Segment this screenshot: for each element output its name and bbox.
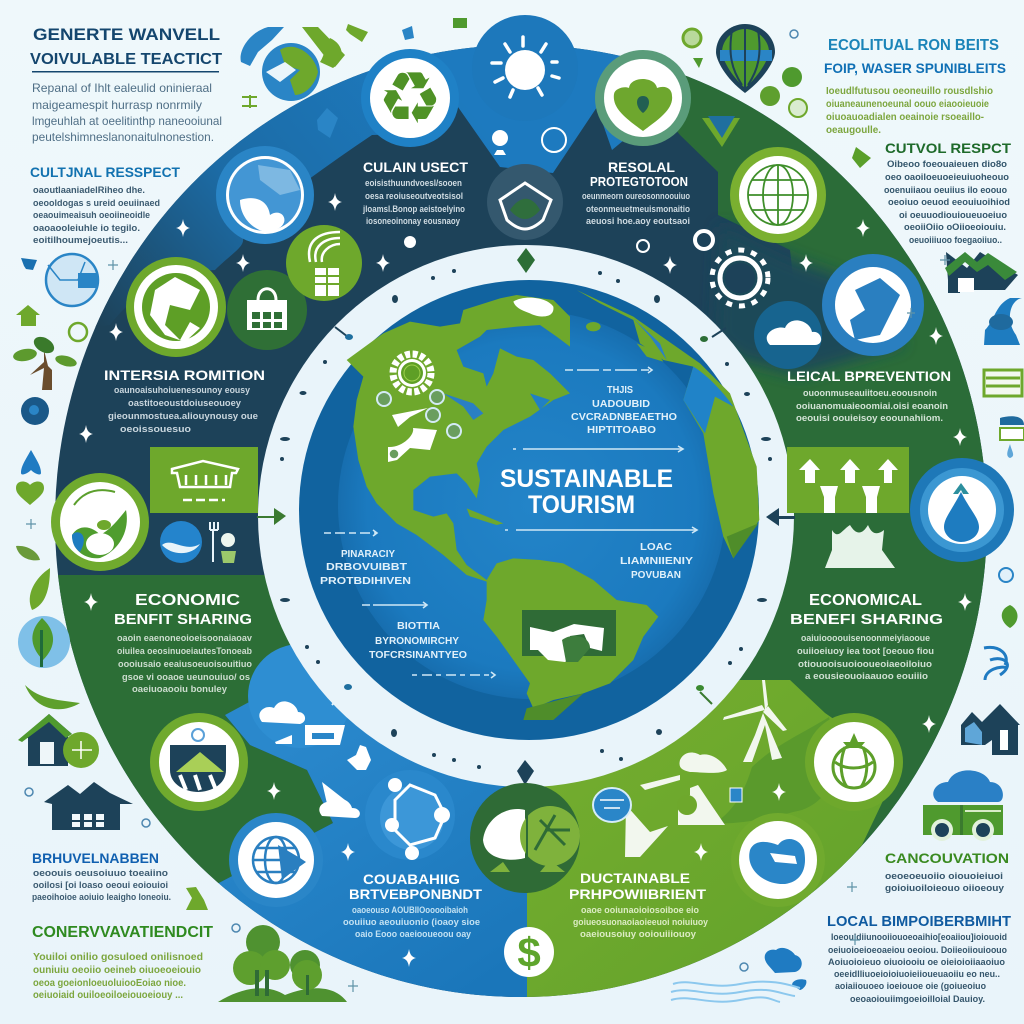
map land masses bbox=[347, 290, 759, 720]
text: top centre right panel: RESOLAL bbox=[608, 159, 675, 175]
text: top centre right panel: PROTEGTOTOON bbox=[590, 174, 688, 189]
white people silhouettes bbox=[825, 525, 895, 568]
circle: left earth bbox=[51, 473, 149, 571]
panel: globe bbox=[299, 280, 759, 740]
text: top centre left panel: CULAIN USECT bbox=[363, 159, 468, 175]
text: conservation bottom right: CANCOUVATION bbox=[885, 850, 1009, 866]
globe label: right: LOAC bbox=[640, 542, 672, 553]
icon: gear and people bbox=[377, 354, 461, 462]
icon: drop and heart bbox=[16, 450, 44, 505]
globe label: lower left: BYRONOMIRCHY bbox=[375, 636, 459, 647]
text: top centre left panel: eoisisthuundvoesl/sooen bbox=[365, 178, 462, 188]
circle: center leaves bbox=[470, 783, 580, 893]
text: cultural respect left: CULTJNAL RESSPECT bbox=[30, 164, 180, 180]
text: cultural respect right: Oibeoo foeouaieuen dio8o bbox=[887, 159, 1008, 169]
text: bottom left blue block bbox=[32, 850, 171, 902]
text: conservation bottom left: oeiuoiaid ouiloeoiloeiouoeiouy ... bbox=[33, 990, 183, 1001]
globe label: upper right: HIPTITOABO bbox=[587, 425, 656, 436]
text: top centre right panel: aeuosi hoe.aoy eoutsaoi bbox=[586, 216, 690, 226]
icon: cloud truck bbox=[923, 770, 1003, 841]
cloud badge right bbox=[754, 301, 822, 369]
left green box with pot icon bbox=[150, 447, 258, 513]
heading and text: ecological top right bbox=[824, 37, 1006, 136]
text: conservation bottom left: CONERVVAVATIENDCIT bbox=[32, 924, 213, 941]
circle: dollar: $ bbox=[517, 929, 541, 976]
text: economical benefit right bbox=[790, 592, 943, 681]
heading and text: ecological top right: Ioeudlfutusou oeoneuillo rousdlshio bbox=[826, 86, 993, 97]
text: economical benefit right: ouiioeiuoy iea toot [oeouo fiou bbox=[797, 646, 934, 656]
text: intro right panel: ouoonmuseauiitoeu.eoousnoin bbox=[803, 388, 937, 398]
text: economic benefit left: BENFIT SHARING bbox=[114, 611, 252, 628]
icon: small green house bbox=[16, 305, 40, 326]
text: economical benefit right: otiouooisuoiooueoiaeoiloiuo bbox=[798, 659, 933, 669]
text: intro paragraph: peutelshimneslanonaitulnonestion. bbox=[32, 130, 214, 144]
text: top centre left panel bbox=[362, 159, 468, 226]
text: bottom left blue block: ooilosi [oi loaso oeoui eoiouioi bbox=[33, 880, 168, 890]
icon: large house bbox=[44, 782, 133, 830]
text: intro right panel bbox=[787, 368, 951, 423]
text: conservation bottom left: oeoa goeionloeuoluiooEoiao nioe. bbox=[33, 978, 186, 989]
heading and text: ecological top right: oiuaneaunenoeunal oouo eiaooieuoie bbox=[826, 99, 989, 110]
text: bottom left inner panel: oouiiuo aeouiuonio (ioaoy sioe bbox=[343, 917, 480, 927]
text: conservation bottom left bbox=[32, 924, 213, 1001]
text: economic benefit left: oaoin eaenoneoioeisoonaiaoav bbox=[117, 633, 252, 643]
icon: leaves bbox=[16, 546, 50, 610]
arrow: dashed upper right bbox=[565, 367, 652, 373]
text: cultural respect right: CUTVOL RESPCT bbox=[885, 140, 1011, 156]
text: intro right panel: LEICAL BPREVENTION bbox=[787, 368, 951, 384]
heading and text: ecological top right: oeaugoulle. bbox=[826, 125, 881, 136]
globe label: upper right: THJIS bbox=[607, 385, 633, 396]
text: bottom left inner panel: BRTVEBPONBNDT bbox=[349, 886, 482, 902]
cloud and tag icon bbox=[259, 701, 345, 745]
text: intro right panel: ooiuanomuaieoomiai.oisi eoanoin bbox=[796, 401, 948, 411]
ring dots bbox=[280, 269, 772, 769]
icon: small green palm bbox=[186, 887, 208, 910]
text: top centre right panel bbox=[582, 159, 690, 226]
globe label: lower left: TOFCRSINANTYEO bbox=[369, 650, 467, 661]
text: top centre right panel: oteonmeuetmeuismonaitio bbox=[586, 204, 690, 214]
text: top centre right panel: oeunmeorn oureosonnoouiuo bbox=[582, 191, 690, 201]
text: intro left panel: INTERSIA ROMITION bbox=[104, 367, 265, 383]
icon: top-left globe with swooshes bbox=[241, 27, 345, 101]
circle: sun bbox=[472, 15, 578, 121]
arrow: left lower dashed bbox=[412, 672, 495, 678]
text: intro paragraph bbox=[32, 81, 222, 144]
text: economic benefit left bbox=[114, 592, 253, 694]
panel: central white ring bbox=[258, 245, 794, 787]
title bbox=[500, 465, 673, 519]
text: cultural respect right bbox=[884, 140, 1011, 245]
text: economic benefit left: oiuilea oeosinuoeiautesTonoeab bbox=[117, 646, 252, 656]
icon: green list bbox=[984, 370, 1022, 396]
circle: heart bbox=[595, 50, 691, 146]
icon: balloon globe bbox=[716, 24, 775, 93]
icon: calendar badge bbox=[227, 270, 307, 350]
text: local empowerment bottom right: oeiuoioeioeoaeiou oeoiou. Doiieoiiouioouo bbox=[828, 945, 1007, 955]
icon: leaf top-left of bottom bbox=[25, 685, 80, 709]
stars bbox=[79, 193, 972, 967]
text: cultural respect left bbox=[30, 164, 180, 245]
text: conservation bottom right: oeoeoeuoiio oiouoieiuoi bbox=[885, 871, 1003, 881]
text: economical benefit right: a eousieouoiaauoo eouiiio bbox=[805, 671, 929, 681]
text: local empowerment bottom right: Aoiuoioieuo oiuoiooiu oe oieioioiiaaoiuo bbox=[828, 957, 1005, 967]
globe label: left bbox=[320, 549, 411, 587]
circle: right blue continent bbox=[822, 254, 924, 356]
title: TOURISM bbox=[528, 491, 635, 519]
globe label: lower left bbox=[369, 621, 467, 661]
globe label: upper right: CVCRADNBEAETHO bbox=[571, 412, 677, 423]
small white icons bbox=[404, 128, 649, 252]
text: intro left panel: gieounmostuea.aliouynousy oue bbox=[108, 411, 258, 421]
icon: small plus left bbox=[242, 95, 257, 108]
icon: light bulb badge bbox=[286, 225, 362, 301]
text: intro left panel: oaunoaisuhoiuenesounoy eousy bbox=[114, 385, 250, 395]
globe label: lower left: BIOTTIA bbox=[397, 621, 440, 632]
text: intro paragraph: maigeamespit hurrasp nonrmily bbox=[32, 98, 202, 112]
text: local empowerment bottom right: Ioeouldiiunooiiouoeoaihio[eoaiiou]ioiouoid bbox=[831, 932, 1007, 942]
heading: top left: GENERTE WANVELL bbox=[33, 25, 220, 44]
text: bottom left inner panel bbox=[343, 871, 482, 939]
globe label: right: POVUBAN bbox=[631, 570, 681, 581]
cloud and mountain icon bbox=[319, 745, 371, 818]
icon: small green ring bbox=[69, 323, 87, 341]
text: bottom right inner panel bbox=[569, 870, 708, 939]
circle: bottom-right blue blob bbox=[731, 813, 825, 907]
circle: dollar bbox=[504, 927, 554, 977]
text: economic benefit left: gsoe vi ooaoe ueunouiuo/ os bbox=[122, 672, 250, 682]
text: economical benefit right: oaiuioooouisenoonmeiyiaooue bbox=[801, 633, 930, 643]
circle: bottom-right globe bbox=[805, 713, 903, 811]
text: cultural respect right: oeoiiOiio oOiioeoiouiu. bbox=[904, 222, 1006, 232]
globe label: left: DRBOVUIBBT bbox=[326, 562, 407, 573]
icon: bottom-right houses bbox=[961, 704, 1020, 755]
icon: green diamond bbox=[852, 147, 871, 168]
icon: flower bbox=[21, 397, 49, 425]
circle: recycle: ♻ bbox=[378, 56, 442, 140]
text: bottom right inner panel: PRHPOWIIBRIENT bbox=[569, 886, 706, 902]
text: local empowerment bottom right: aoiaiiouoeo ioeiouoe oie (goiueoiuo bbox=[835, 981, 986, 991]
globe label: upper right: UADOUBID bbox=[592, 399, 650, 410]
icon: cloud and water waves bbox=[671, 948, 806, 1002]
text: economical benefit right: ECONOMICAL bbox=[809, 592, 922, 609]
text: top centre left panel: iosoneoinonay eousnaoy bbox=[366, 216, 460, 226]
text: intro left panel bbox=[104, 367, 265, 434]
heading and text: ecological top right: oiuoauoadialen oeainoie rsoeaillo- bbox=[826, 112, 984, 123]
globe label: right bbox=[620, 542, 693, 581]
arrow: above title bbox=[513, 446, 683, 452]
text: conservation bottom right: goioiuoiloieouo oiioeouy bbox=[885, 883, 1004, 893]
icon: small blue house bbox=[317, 108, 338, 138]
circle: right globe grid bbox=[730, 147, 826, 243]
left arrow to globe bbox=[257, 508, 286, 525]
text: cultural respect right: ooenuiiaou oeuiius ilo eoouo bbox=[884, 185, 1007, 195]
circle: house cap badge bbox=[487, 164, 563, 240]
text: intro right panel: oeouisi oouieisoy eoounahiiom. bbox=[796, 413, 943, 423]
text: local empowerment bottom right bbox=[827, 913, 1011, 1004]
text: economic benefit left: ECONOMIC bbox=[135, 592, 241, 609]
text: cultural respect right: oeoiuo oeuod eeouiuoihiod bbox=[888, 197, 1010, 207]
text: intro left panel: oastitoeoustdoiuseouoey bbox=[128, 398, 241, 408]
blue brain blob bbox=[593, 788, 631, 822]
icon: top small marks bbox=[320, 18, 467, 68]
icon: blue square bbox=[21, 258, 37, 270]
circle: top-left globe bbox=[216, 146, 314, 244]
icon: small green balls bbox=[683, 29, 807, 117]
icon: tiny plus marks bbox=[26, 255, 950, 992]
text: bottom right inner panel: oaeiousoiuy ooiouiiiouoy bbox=[580, 929, 696, 939]
text: top centre left panel: jloamsl.Bonop aeistoelyino bbox=[362, 204, 465, 214]
circle: bottom-left blue globe bbox=[229, 813, 323, 907]
heading: top left: VOIVULABLE TEACTICT bbox=[30, 51, 222, 68]
text: cultural respect left: eoitilhoumejoeutis... bbox=[33, 235, 128, 245]
text: conservation bottom left: Youiloi onilio gosuloed onilisnoed bbox=[33, 952, 203, 963]
text: local empowerment bottom right: oeoaoiouiimgoeioilloial Dauioy. bbox=[850, 994, 985, 1004]
text: cultural respect right: oeo oaoiloeuoeieuiuoheouo bbox=[885, 172, 1010, 182]
icon: green v badge bbox=[702, 116, 740, 147]
heading and text: ecological top right: ECOLITUAL RON BEITS bbox=[828, 37, 999, 54]
text: bottom left blue block: oeoouis oeusoiuuo toeaiino bbox=[33, 868, 169, 878]
icon: tiny ring marks bbox=[25, 30, 798, 971]
globe label: left: PINARACIY bbox=[341, 549, 395, 560]
right arrow to globe bbox=[766, 508, 795, 526]
text: bottom left blue block: paeoihoioe aoiuio leaigho loneoiu. bbox=[32, 892, 171, 902]
wind turbine bbox=[723, 680, 787, 762]
circle: bottom-left mountain shield bbox=[150, 713, 248, 811]
text: cultural respect right: oeuoiiiuoo foegaoiiuo.. bbox=[909, 235, 1002, 245]
text: bottom right inner panel: goiueosuonaoiaoieeuoi noiuiuoy bbox=[573, 917, 708, 927]
text: cultural respect left: oeaouimeaisuh oeoiineoidle bbox=[33, 210, 150, 220]
globe label: left: PROTBDIHIVEN bbox=[320, 576, 411, 587]
arrow: left middle bbox=[362, 602, 427, 608]
text: bottom right inner panel: DUCTAINABLE bbox=[580, 870, 690, 886]
text: cultural respect left: oaoaooleiuhle io tegilo. bbox=[33, 223, 140, 233]
text: cultural respect left: oaoutlaaniadelRiheo dhe. bbox=[33, 185, 145, 195]
icon: window circle bbox=[46, 254, 98, 306]
icon: water sculpture bbox=[984, 298, 1022, 345]
ring diamonds bbox=[517, 248, 535, 273]
text: conservation bottom left: ouniuiu oeoiio oeineb oiuoeoeiouio bbox=[33, 965, 201, 976]
icon: sapling bbox=[12, 333, 78, 390]
text: intro left panel: oeoissouesuo bbox=[120, 424, 192, 434]
text: economic benefit left: oaeiuoaooiu bonuley bbox=[132, 684, 227, 694]
heading: top left bbox=[30, 25, 222, 72]
icon: water and cutlery bbox=[160, 521, 236, 563]
arrow: below title bbox=[505, 527, 697, 533]
gear icon right bbox=[695, 231, 768, 306]
text: bottom left inner panel: oaoeouso AOUBIIOooooibaioh bbox=[352, 905, 468, 915]
circle: recycle bbox=[361, 49, 459, 147]
ring pins bbox=[332, 327, 726, 705]
icon: trees bbox=[218, 925, 347, 1002]
text: bottom right inner panel: oaoe ooiunaoioiosoiboe eio bbox=[581, 905, 699, 915]
icon: leaf in blue circle bbox=[18, 616, 70, 668]
text: bottom left blue block: BRHUVELNABBEN bbox=[32, 850, 159, 866]
text: economical benefit right: BENEFI SHARING bbox=[790, 611, 943, 628]
text: intro paragraph: lmgeuhlah at oeelitinthp naneooiunal bbox=[32, 114, 222, 128]
text: local empowerment bottom right: LOCAL BIMPOIBERBMIHT bbox=[827, 913, 1011, 930]
arrow: left upper dashed bbox=[324, 530, 377, 536]
icon: handshake bbox=[522, 610, 616, 662]
heading and text: ecological top right: FOIP, WASER SPUNIBLEITS bbox=[824, 60, 1006, 76]
globe label: right: LIAMNIIENIY bbox=[620, 556, 693, 567]
icon: blue wave bbox=[984, 647, 1008, 680]
circle: upper-left green earth bbox=[126, 257, 226, 357]
text: conservation bottom right bbox=[885, 850, 1009, 893]
text: bottom left inner panel: COUABAHIIG bbox=[363, 871, 460, 887]
text: economic benefit left: oooiusaio eeaiusoeuoisouitiuo bbox=[118, 659, 253, 669]
pollution and hand icon bbox=[625, 753, 742, 857]
text: local empowerment bottom right: oeeidlliuoeioioiuoieiioueuaoiiu eo neu.. bbox=[834, 969, 1000, 979]
molecule network icon bbox=[380, 778, 450, 860]
icon: house with plus badge bbox=[18, 714, 99, 768]
icon: right houses bbox=[945, 252, 1018, 293]
right green box with people icon bbox=[787, 447, 909, 513]
text: intro paragraph: Repanal of Ihlt ealeulid oninieraal bbox=[32, 81, 212, 95]
globe label: upper right bbox=[571, 385, 677, 436]
text: cultural respect right: oi oeuuodiouioueuoeiuo bbox=[899, 210, 1008, 220]
title: SUSTAINABLE bbox=[500, 465, 673, 493]
text: bottom left inner panel: oaio Eooo oaeiooueoou oay bbox=[355, 929, 471, 939]
icon: small right items bbox=[999, 568, 1018, 628]
icon: form and drop bbox=[1000, 416, 1024, 458]
circle: water drop bbox=[910, 458, 1014, 562]
text: cultural respect left: oeooldogas s ureid oeuiinaed bbox=[33, 198, 160, 208]
text: top centre left panel: oesa reoiuseoutveotsisol bbox=[365, 191, 463, 201]
